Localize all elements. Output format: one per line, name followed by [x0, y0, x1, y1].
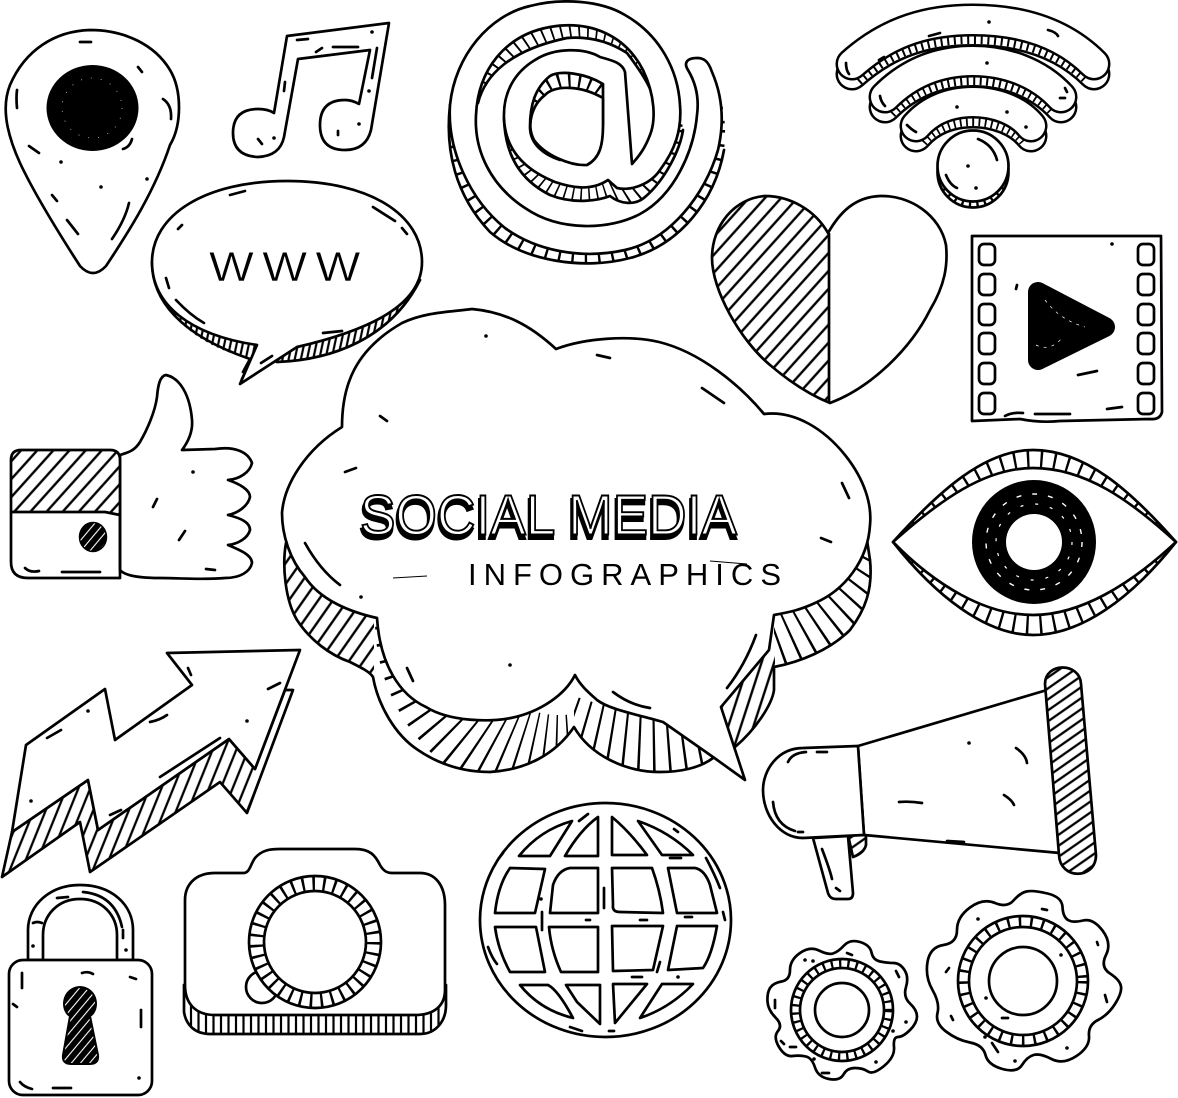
- lock body: [9, 960, 152, 1095]
- at sign ribbon: [450, 1, 722, 254]
- icon: padlock: [9, 885, 152, 1095]
- eye iris: [972, 480, 1096, 604]
- large gear rings: [958, 916, 1088, 1046]
- panel: central speech cloud: [280, 308, 872, 782]
- thumb hand: [120, 375, 252, 579]
- icon: music note: [233, 23, 389, 157]
- camera button: [246, 971, 278, 1003]
- icon: at sign: [449, 1, 724, 263]
- wifi dot: [938, 130, 1008, 208]
- cloud hatched depth: [282, 542, 872, 774]
- wifi middle arc: [885, 61, 1061, 107]
- icon: play triangle: [1038, 292, 1105, 360]
- camera lens: [249, 876, 381, 1008]
- at sign counter: [530, 73, 614, 167]
- wifi outer arc: [852, 20, 1094, 74]
- icon: video film strip: [972, 236, 1162, 422]
- title: SOCIAL MEDIA: [359, 487, 736, 551]
- title: SOCIAL MEDIA: [360, 483, 737, 547]
- at sign hatched depth: [449, 18, 724, 263]
- icon: camera: [184, 849, 446, 1034]
- icon: globe: [480, 803, 731, 1037]
- keyhole: [63, 987, 98, 1064]
- thumb cuff: [11, 450, 120, 578]
- small gear rings: [791, 959, 893, 1061]
- megaphone cone: [858, 690, 1060, 853]
- icon: thumbs up: [11, 375, 252, 579]
- wifi inner arc: [916, 102, 1031, 136]
- megaphone mouth: [1045, 668, 1096, 874]
- subtitle: INFOGRAPHICS: [468, 557, 781, 592]
- www text: WWW: [209, 244, 369, 290]
- icon: large gear: [927, 891, 1121, 1070]
- icon: heart: [712, 196, 947, 403]
- icon: wifi signal: [846, 20, 1094, 208]
- film holes: [979, 244, 1154, 414]
- megaphone grip: [763, 746, 864, 838]
- icon: location pin: [6, 30, 179, 273]
- icon: small gear: [767, 941, 917, 1079]
- cloud face: [282, 309, 870, 780]
- globe panels: [495, 817, 717, 1024]
- icon: eye: [893, 450, 1176, 635]
- icon: growth arrow: [2, 650, 300, 877]
- shackle: [28, 885, 133, 960]
- icon: speech bubble www: [150, 181, 425, 385]
- icon: megaphone: [763, 668, 1096, 899]
- megaphone handle: [813, 835, 866, 899]
